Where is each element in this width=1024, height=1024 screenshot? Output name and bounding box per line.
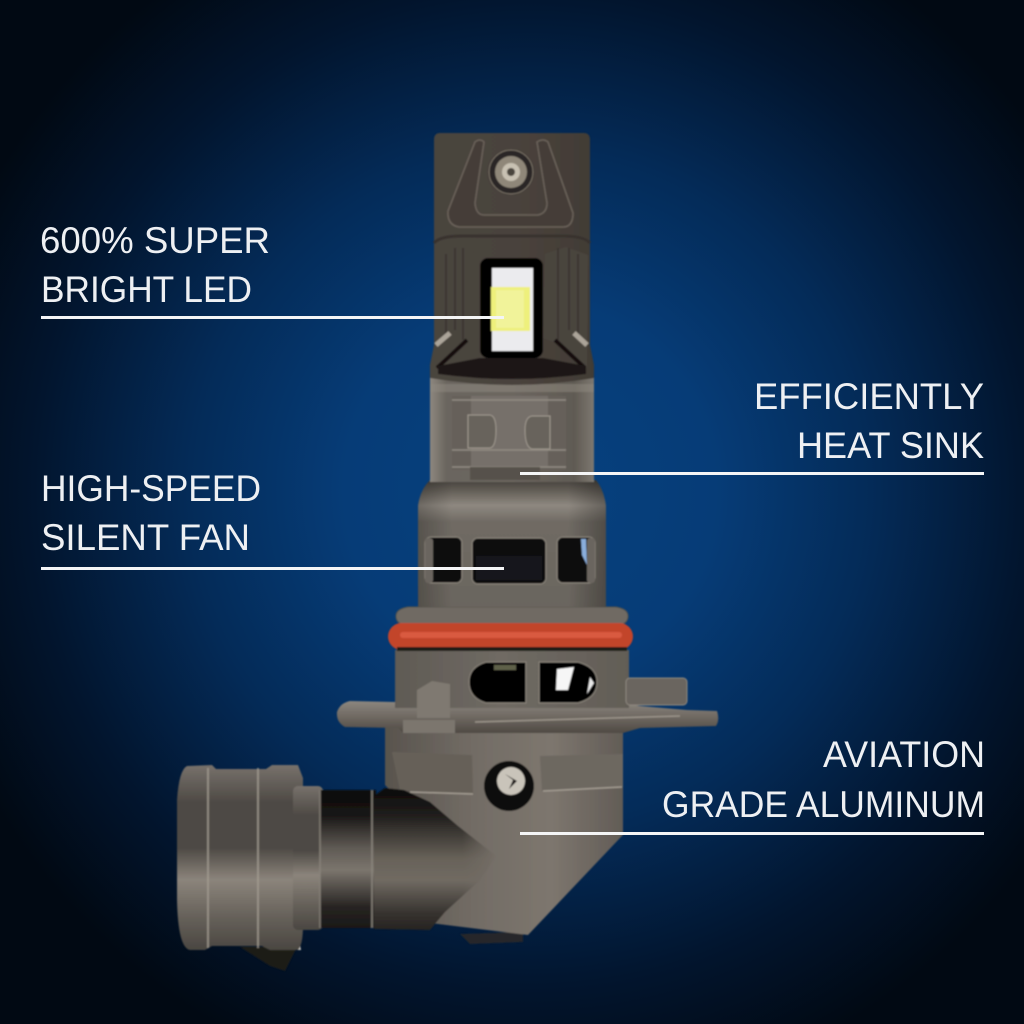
connector: rear cap bbox=[177, 765, 303, 971]
head: top screw bbox=[488, 149, 534, 195]
elbow: dark bend bbox=[374, 788, 496, 930]
red O-ring bbox=[388, 623, 633, 650]
heat fins: left bbox=[436, 247, 480, 368]
label text: 600% SUPER bbox=[40, 220, 270, 261]
heat fins: right bbox=[543, 247, 588, 368]
dark vent band bbox=[438, 358, 586, 379]
LED housing bbox=[480, 258, 543, 358]
fan vents bbox=[425, 537, 595, 584]
label text: GRADE ALUMINUM bbox=[662, 784, 985, 825]
label text: HIGH-SPEED bbox=[41, 468, 261, 509]
dark gap under O-ring bbox=[397, 647, 627, 651]
head: dark upper block bbox=[430, 133, 594, 385]
base collar bbox=[395, 650, 629, 708]
feature callout: high-speed silent fan bbox=[41, 468, 504, 570]
label text: BRIGHT LED bbox=[41, 269, 252, 310]
left tab bbox=[417, 681, 450, 718]
collar windows bbox=[469, 662, 597, 703]
label text: AVIATION bbox=[823, 734, 985, 775]
mounting plate bbox=[337, 701, 718, 733]
leader line bbox=[520, 472, 984, 475]
head: arc band bbox=[434, 236, 590, 243]
LED chip bbox=[491, 268, 533, 351]
leader line bbox=[41, 316, 504, 319]
label text: HEAT SINK bbox=[797, 425, 984, 466]
label text bbox=[40, 220, 270, 310]
leader line bbox=[41, 567, 504, 570]
feature callout: 600% super bright LED bbox=[40, 220, 504, 319]
fan housing bbox=[418, 480, 606, 607]
right tab bbox=[626, 678, 687, 705]
leader line bbox=[520, 832, 984, 835]
label text: EFFICIENTLY bbox=[754, 376, 984, 417]
label text bbox=[41, 468, 261, 558]
head: embossed trapezoid bbox=[448, 140, 573, 227]
label text bbox=[754, 376, 984, 466]
feature callout: efficiently heat sink bbox=[520, 376, 984, 475]
feature callout: aviation grade aluminum bbox=[520, 734, 985, 835]
neck: heat sink bbox=[430, 372, 594, 482]
label text bbox=[662, 734, 985, 825]
sealing ring top flange bbox=[396, 607, 628, 625]
connector: pipe bbox=[293, 786, 376, 930]
product: LED headlight bulb bbox=[177, 133, 718, 971]
label text: SILENT FAN bbox=[41, 517, 250, 558]
lower body: aviation aluminum housing bbox=[385, 725, 623, 944]
screw: body bbox=[484, 761, 534, 811]
O-ring highlight bbox=[400, 632, 622, 638]
